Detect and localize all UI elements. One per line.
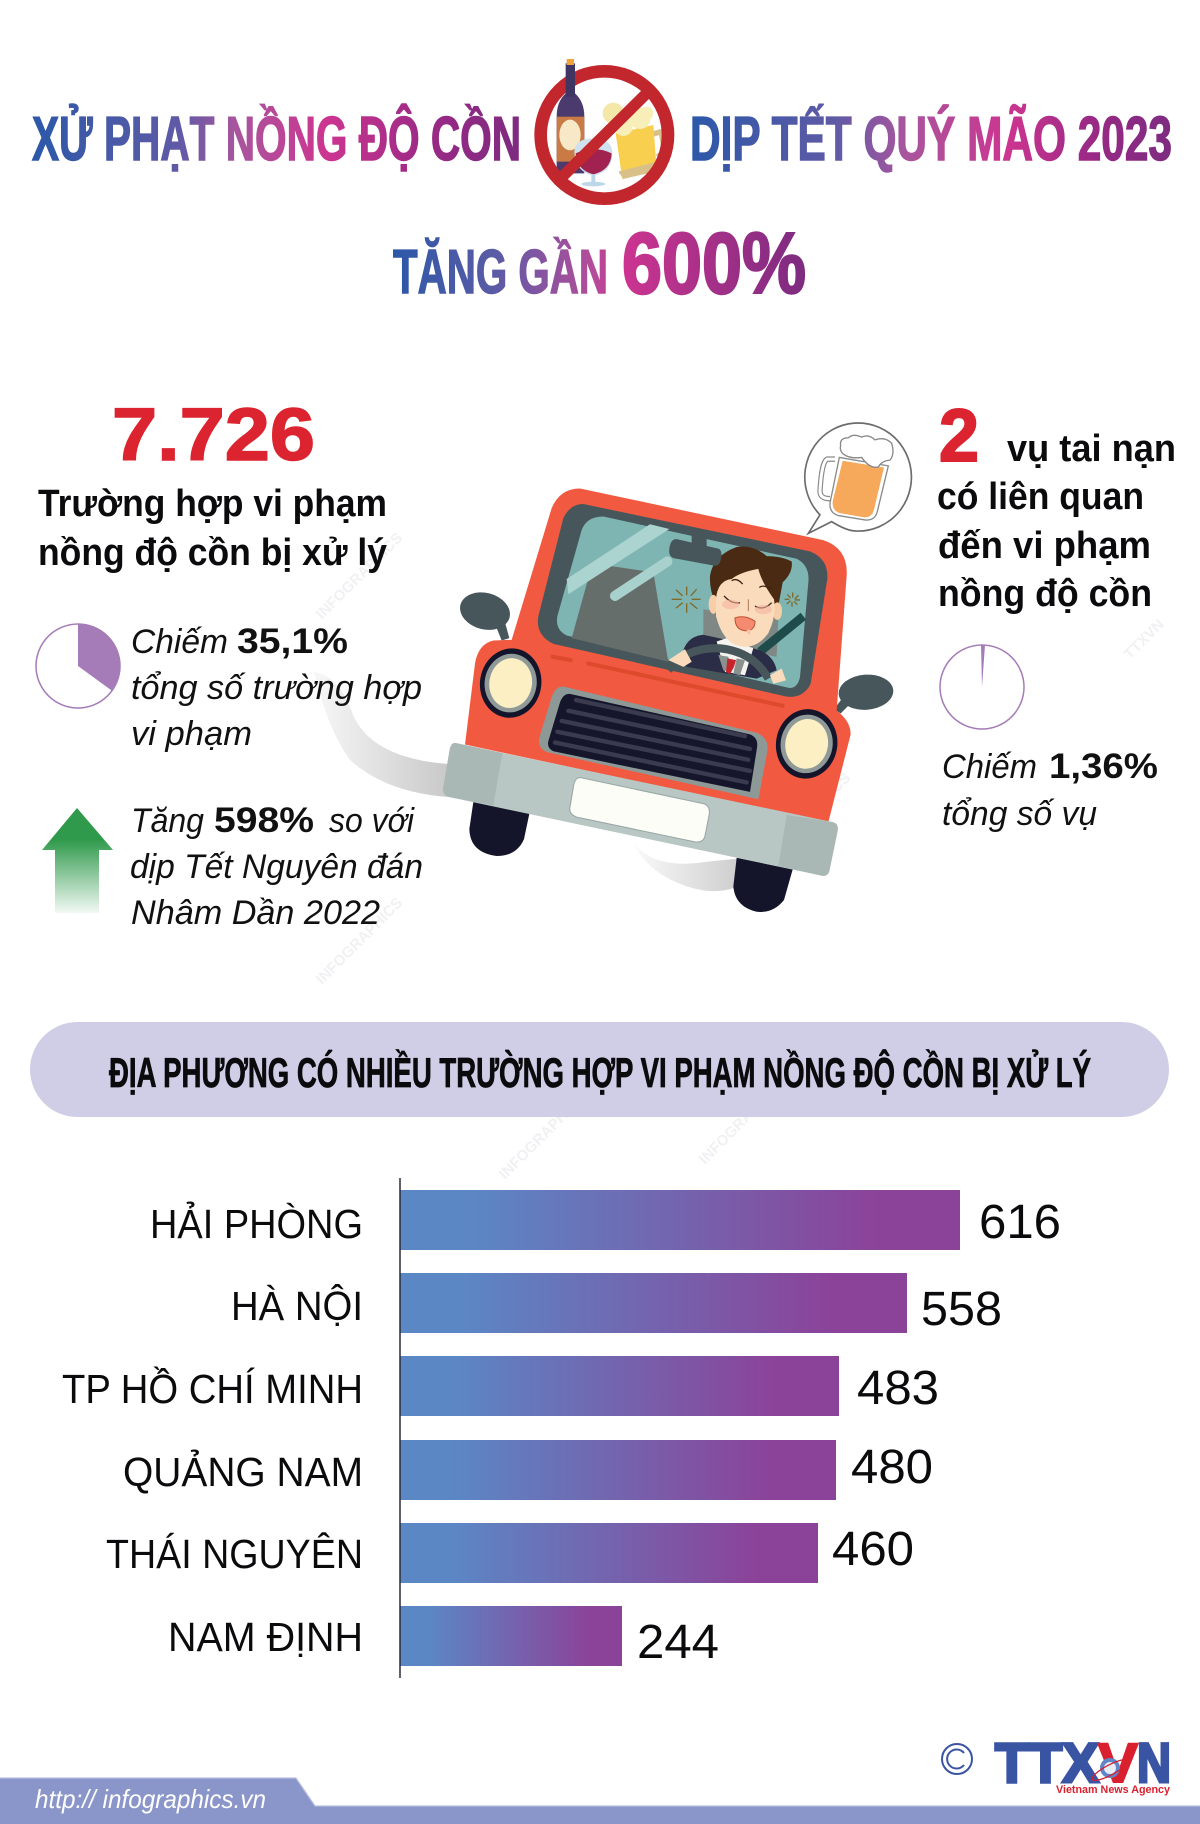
icon: green up arrow <box>42 808 113 913</box>
axis line <box>399 1178 401 1678</box>
text: share of accidents: 1,36% <box>1049 747 1158 786</box>
description of accidents: nồng độ cồn <box>938 573 1152 615</box>
category labels: THÁI NGUYÊN <box>106 1531 363 1577</box>
bars <box>400 1190 960 1666</box>
text: share of violations: vi phạm <box>131 715 252 753</box>
value labels: 244 <box>637 1616 719 1669</box>
panel: right statistics <box>937 394 1176 833</box>
value labels: 480 <box>851 1441 933 1494</box>
description of accidents: vụ tai nạn <box>1007 428 1176 470</box>
description of violations: Trường hợp vi phạm <box>38 483 387 525</box>
text: increase compared to 2022 <box>130 801 423 932</box>
description of accidents: đến vi phạm <box>938 525 1151 567</box>
text: increase compared to 2022: so với <box>329 802 415 840</box>
logo globe <box>1090 1756 1130 1784</box>
category labels: NAM ĐỊNH <box>168 1614 363 1660</box>
watermarks: INFOGRAPHICS <box>313 894 406 988</box>
description of violations: nồng độ cồn bị xử lý <box>38 532 387 574</box>
watermarks: INFOGRAPHICS <box>313 529 406 623</box>
driver <box>668 547 800 684</box>
logo: TTXVN: TTX <box>995 1731 1099 1794</box>
radiator grille <box>539 686 768 799</box>
title <box>32 105 1172 312</box>
illustration: drunk driver in car <box>443 423 911 912</box>
title second line: TĂNG GẦN <box>393 238 608 307</box>
category labels: TP HỒ CHÍ MINH <box>62 1366 363 1412</box>
text: share of accidents: Chiếm <box>942 748 1037 786</box>
logo: TTXVN <box>995 1731 1171 1796</box>
category labels: QUẢNG NAM <box>123 1449 363 1495</box>
copyright symbol <box>942 1744 972 1774</box>
value labels: 616 <box>979 1196 1061 1249</box>
big number 2: 2 <box>939 394 979 477</box>
bumper <box>443 743 838 876</box>
description of violations <box>38 483 387 574</box>
text: share of violations <box>131 622 422 753</box>
text: increase compared to 2022: 598% <box>214 801 314 840</box>
watermarks: TTXVN <box>1121 616 1168 663</box>
category labels: HẢI PHÒNG <box>150 1201 363 1247</box>
watermarks: INFOGRAPHICS <box>696 1074 789 1168</box>
description of accidents <box>937 428 1176 615</box>
logo tagline: Vietnam News Agency <box>1056 1784 1171 1796</box>
text: increase compared to 2022: dịp Tết Nguyên đán <box>130 848 423 886</box>
rear-view mirror <box>669 533 721 566</box>
title highlight percentage: 600% <box>622 216 806 312</box>
text: share of violations: Chiếm <box>131 623 228 661</box>
icon: no alcohol sign <box>539 59 669 200</box>
watermarks <box>313 529 1168 1183</box>
footer band <box>0 1778 1200 1824</box>
watermarks: INFOGRAPHICS <box>496 1089 589 1183</box>
text: share of violations: tổng số trường hợp <box>131 669 422 707</box>
title left part: XỬ PHẠT NỒNG ĐỘ CỒN <box>32 105 521 174</box>
value labels <box>637 1196 1061 1669</box>
text: share of violations: 35,1% <box>237 622 348 661</box>
hood lines <box>553 657 783 706</box>
panel: left statistics <box>36 393 423 932</box>
windshield <box>538 504 827 697</box>
value labels: 558 <box>921 1283 1002 1336</box>
headlights <box>475 643 843 784</box>
pie chart 35,1% <box>36 624 120 708</box>
side mirrors <box>456 587 894 713</box>
bar chart <box>62 1178 1061 1678</box>
text: share of accidents: tổng số vụ <box>942 795 1097 833</box>
value labels: 460 <box>832 1523 914 1576</box>
big number 7.726: 7.726 <box>112 393 315 476</box>
wheels <box>469 802 793 912</box>
license plate <box>570 778 709 842</box>
exhaust smoke under car <box>633 843 737 891</box>
text: share of accidents <box>942 747 1158 833</box>
section heading pill <box>30 1022 1169 1117</box>
website url: http:// infographics.vn <box>35 1784 266 1814</box>
icon: exhaust smoke left <box>314 672 448 797</box>
description of accidents: có liên quan <box>937 476 1144 518</box>
pie chart 1,36% <box>940 645 1024 729</box>
text: increase compared to 2022: Nhâm Dần 2022 <box>131 894 380 932</box>
car body <box>465 489 851 822</box>
value labels: 483 <box>857 1362 939 1415</box>
watermarks: INFOGRAPHICS <box>761 769 854 863</box>
category labels: HÀ NỘI <box>231 1283 363 1329</box>
logo: TTXVN: V <box>1098 1731 1138 1794</box>
text: increase compared to 2022: Tăng <box>131 802 204 840</box>
category labels <box>62 1201 363 1660</box>
speech bubble with beer mug <box>805 423 911 533</box>
logo: TTXVN: N <box>1137 1731 1171 1794</box>
